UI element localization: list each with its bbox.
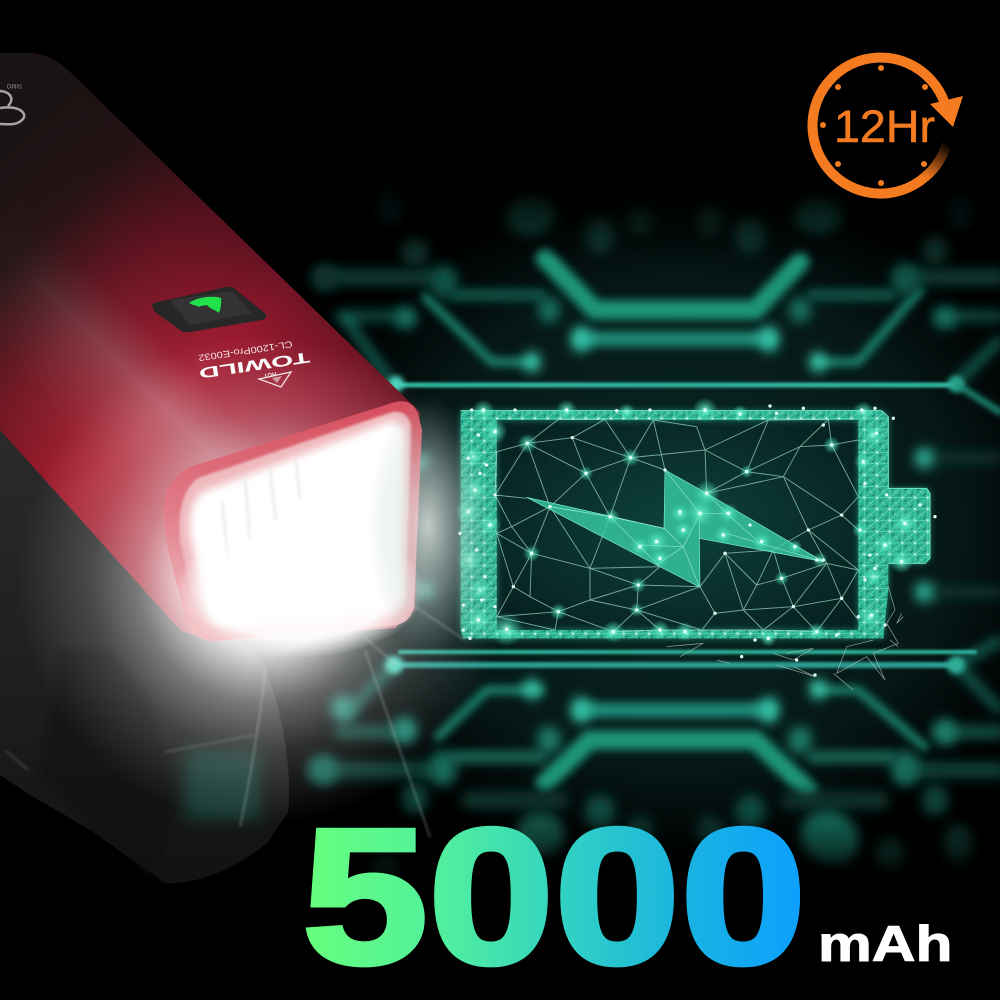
thin bright edge of the band: [461, 411, 930, 563]
hot warning icon: [259, 370, 291, 387]
lightning bolt: [527, 470, 823, 587]
white haze over mount and body: [17, 335, 507, 825]
upper traces: [312, 187, 1000, 412]
model text: CL-1200Pro-E0032: [198, 339, 293, 363]
green flame icon: [189, 297, 221, 313]
band outer glow: [461, 411, 930, 638]
mount edge highlight: [5, 735, 255, 770]
clock tick dots: [820, 65, 928, 186]
swirl mark: [0, 91, 24, 124]
handlebar mount: [0, 400, 289, 883]
bezel lit inner rim: [179, 412, 411, 634]
lower traces: [308, 640, 1000, 884]
node highlights: [460, 406, 935, 675]
red housing: [0, 53, 420, 642]
mount clamp: [40, 650, 172, 880]
pink bezel: [164, 401, 422, 641]
5000 capacity number: 5000: [302, 788, 806, 1000]
mesh lines inside battery: [495, 419, 858, 632]
arrowhead: [930, 96, 963, 127]
12 hour clock icon: [813, 58, 963, 194]
battery cell interior: [495, 418, 860, 632]
lens flare right: [368, 395, 488, 655]
brand text: TOWILD: [197, 348, 311, 381]
button housing: [152, 287, 266, 332]
bloom at lens bottom: [175, 522, 425, 658]
lens ribs: [222, 460, 300, 560]
circuit board traces: [308, 187, 1000, 884]
clock ring: [813, 58, 945, 194]
battery outline band: [461, 411, 930, 638]
light rays: [240, 600, 465, 837]
side nodes beside the battery: [412, 448, 1000, 602]
12Hr label: 12Hr: [834, 101, 935, 152]
dark rear shading: [0, 53, 420, 642]
ring fade: [925, 143, 947, 177]
button face: [170, 291, 252, 325]
dark teal board tint: [280, 175, 1000, 875]
front bezel and lens: [164, 401, 422, 641]
bolt mesh: [550, 470, 823, 587]
glow halos on nodes: [456, 397, 918, 647]
crumbling mesh fragments at bottom right: [667, 587, 903, 690]
mAh unit label: mAh: [818, 916, 952, 972]
near light glow and rays: [175, 395, 488, 837]
power button: [152, 287, 266, 332]
hot warning icon: HOT: [263, 370, 277, 378]
teal reflection on mount: [185, 750, 260, 820]
mount silhouette: [0, 400, 289, 883]
white lens: [190, 422, 406, 628]
brand small text: SIMO: [6, 82, 22, 88]
flashlight body: [0, 53, 420, 642]
battery graphic: [456, 397, 935, 690]
logo on rear: [0, 82, 24, 124]
